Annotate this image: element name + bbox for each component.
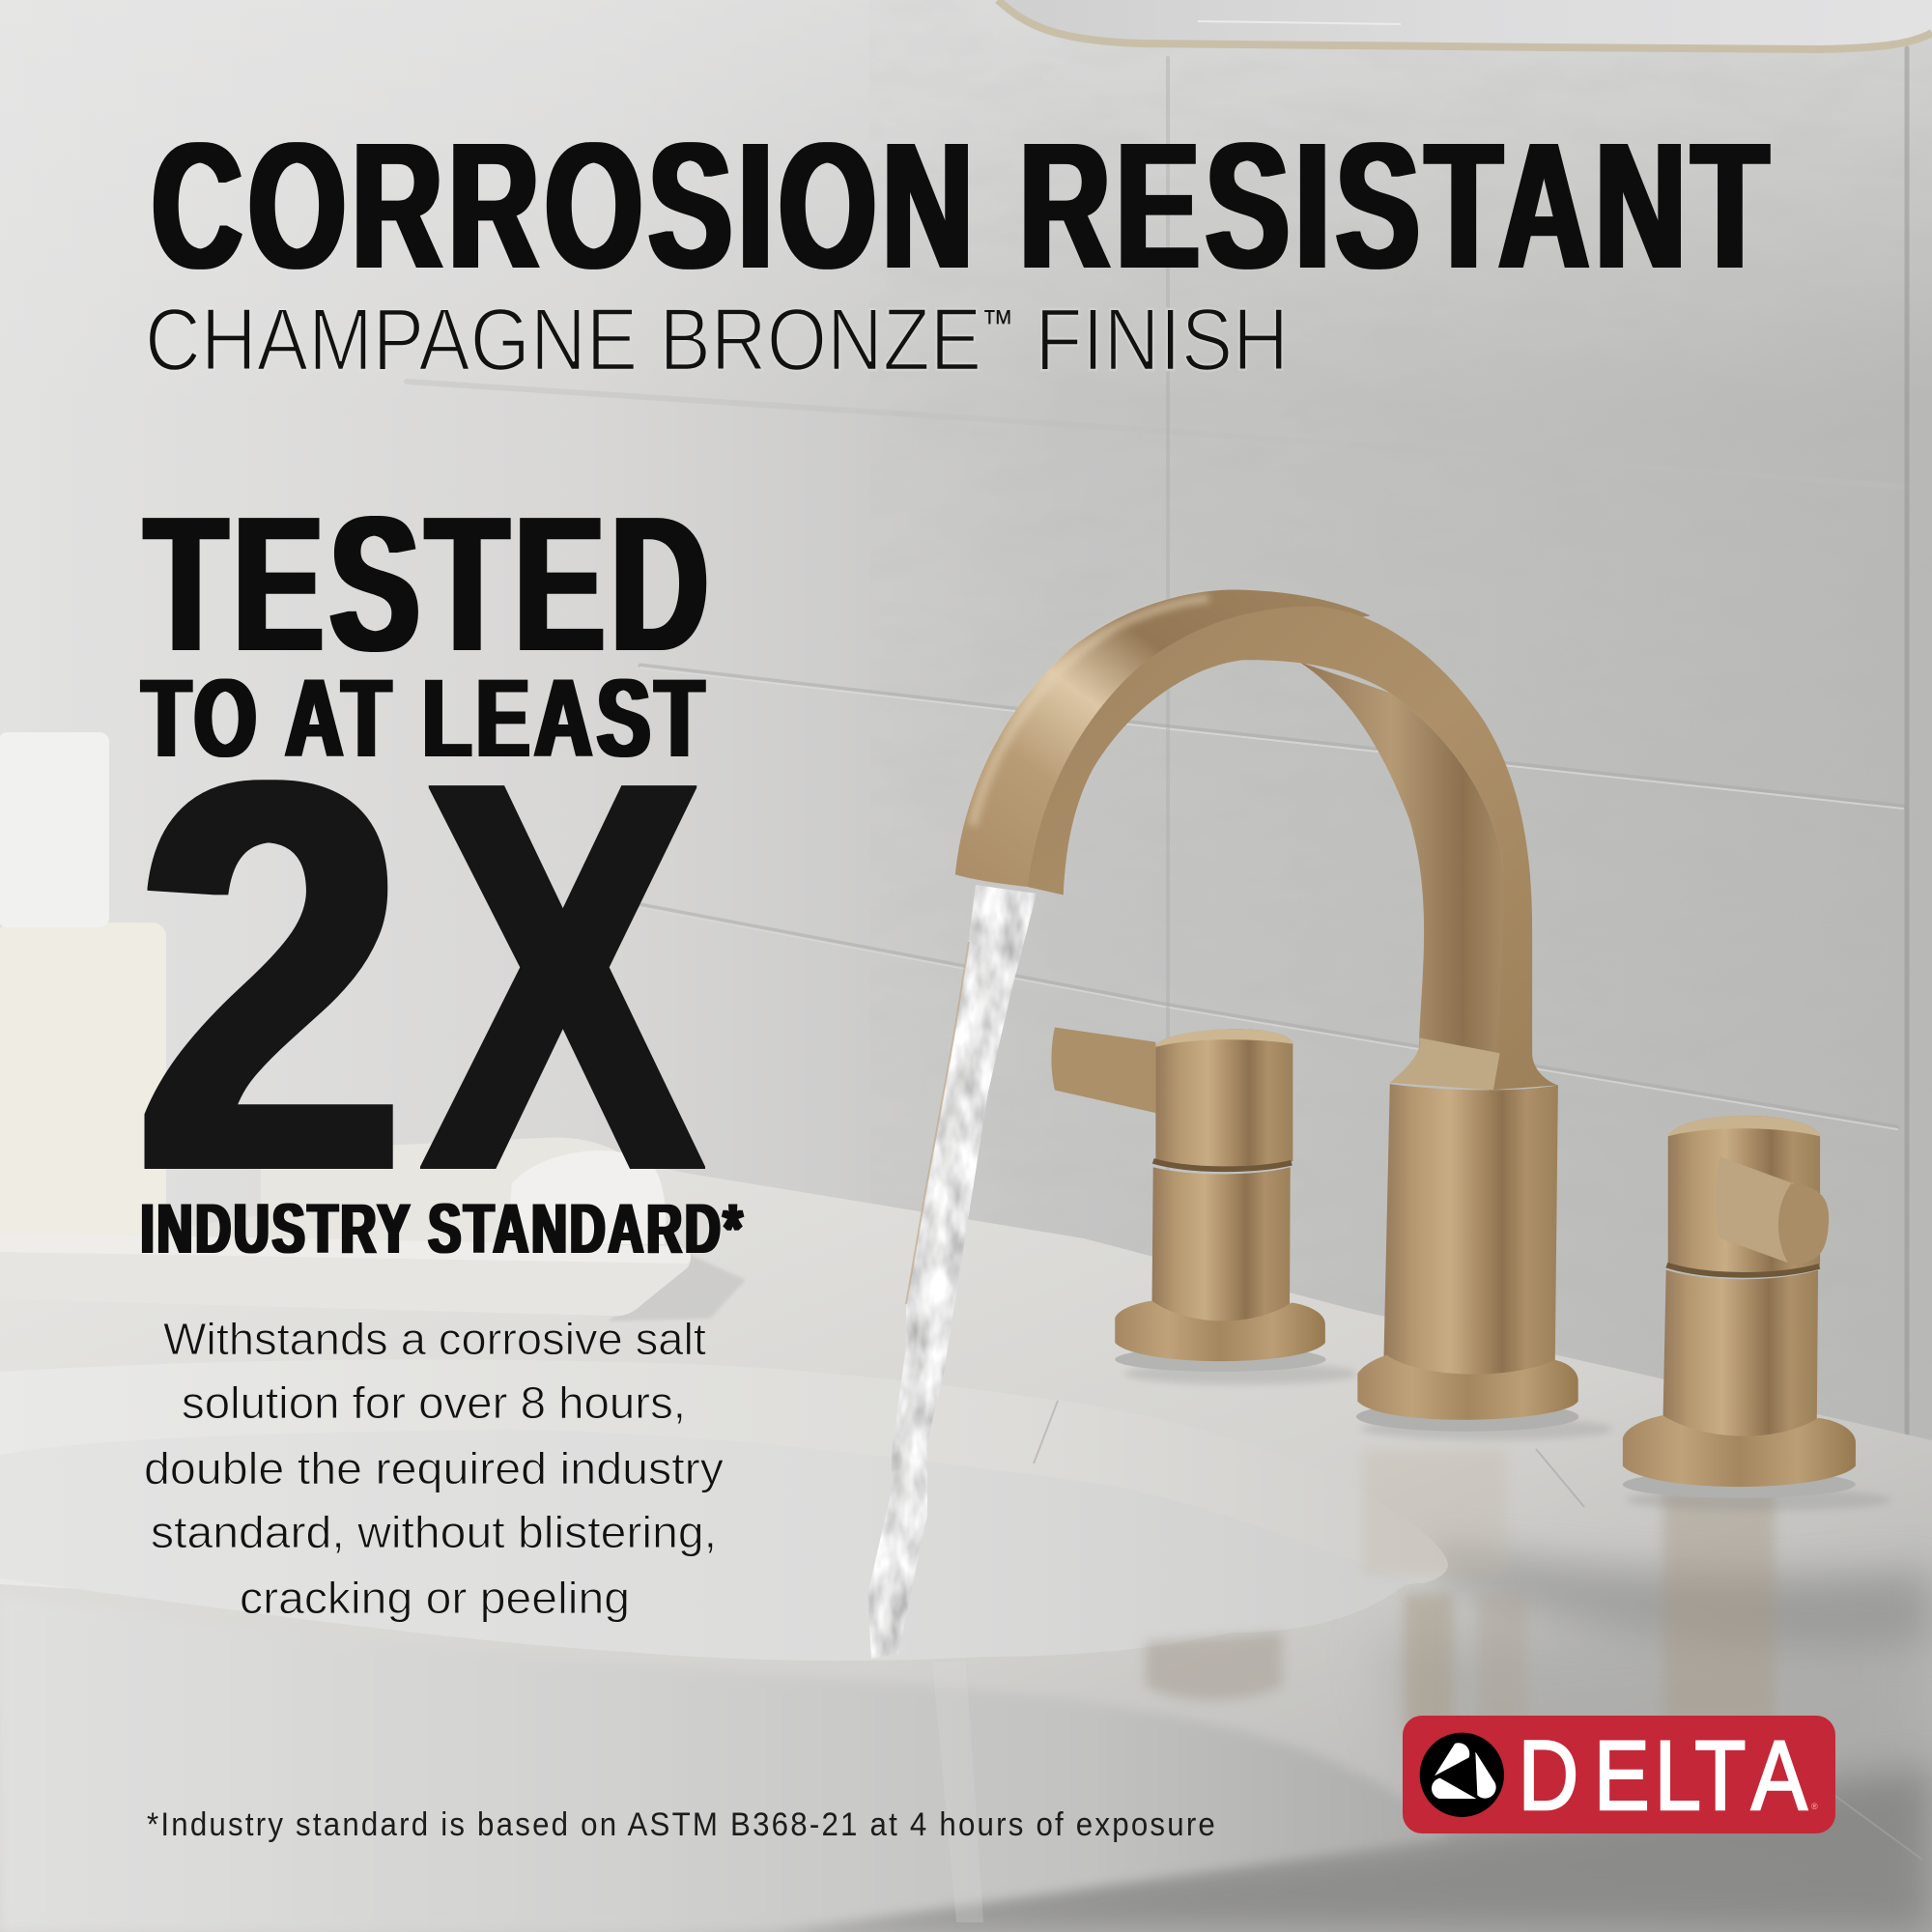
claim: 2X, letter: X — [422, 668, 705, 1287]
body text: Withstands a corrosive salt — [163, 1314, 706, 1364]
center base — [1357, 1355, 1578, 1420]
logo mark — [1420, 1733, 1504, 1817]
water reflection — [932, 1662, 983, 1922]
right handle dome — [1668, 1116, 1820, 1136]
base shadows — [1124, 1362, 1891, 1511]
title: CORROSION RESISTANT — [152, 106, 1769, 307]
registered mark: ® — [1811, 1802, 1818, 1811]
body text — [144, 1314, 724, 1623]
footnote: *Industry standard is based on ASTM B368-21 at 4 hours of exposure — [147, 1805, 1215, 1842]
body text: standard, without blistering, — [151, 1507, 717, 1557]
subtitle: ™ — [981, 303, 1013, 344]
left lever — [1051, 1027, 1155, 1113]
spout front face — [1028, 607, 1558, 1091]
sink rim — [0, 1359, 1448, 1642]
right base — [1623, 1415, 1856, 1487]
right handle seam — [1666, 1265, 1819, 1275]
left base — [1115, 1301, 1325, 1361]
tube cap — [507, 1151, 666, 1244]
tray — [0, 1233, 691, 1316]
spout highlight — [973, 599, 1208, 825]
left base washer — [1115, 1347, 1326, 1372]
left handle top — [1155, 1029, 1293, 1170]
left handle seam — [1153, 1161, 1292, 1169]
logo plate — [1403, 1716, 1835, 1833]
left products: bottle and tube on a tray — [0, 732, 746, 1321]
claim: industry standard: INDUSTRY STANDARD* — [141, 1190, 743, 1268]
subtitle: FINISH — [1013, 291, 1289, 389]
right base washer — [1623, 1471, 1856, 1498]
neck flare — [1390, 1037, 1500, 1091]
mirror at top right — [998, 0, 1932, 49]
right handle top — [1668, 1116, 1820, 1276]
claim: to at least: TO AT LEAST — [142, 657, 704, 781]
bottle body — [0, 923, 166, 1241]
right handle lower — [1662, 1270, 1818, 1437]
faucet — [955, 589, 1891, 1511]
water stream — [867, 885, 1036, 1922]
sink front left surface — [0, 1594, 1449, 1932]
bottle cap — [0, 732, 109, 927]
subtitle: CHAMPAGNE BRONZE — [145, 291, 1106, 389]
logo wordmark: DELTA — [1519, 1720, 1807, 1832]
claim block — [134, 478, 743, 1287]
sink basin — [0, 1430, 1410, 1661]
body text: double the required industry — [144, 1443, 724, 1493]
spout back tube — [955, 589, 1371, 895]
marble counter top — [0, 1159, 1932, 1932]
right lever wedge — [1716, 1156, 1794, 1263]
Delta logo — [1403, 1716, 1835, 1833]
left handle lower — [1151, 1167, 1291, 1326]
rim vein — [1034, 1401, 1058, 1463]
background: tiled wall — [0, 0, 1932, 1546]
body text: solution for over 8 hours, — [182, 1378, 686, 1428]
claim: 2X, numeral: 2 — [134, 667, 406, 1286]
body text: cracking or peeling — [240, 1573, 630, 1623]
tray shadow — [609, 1248, 746, 1321]
center column — [1383, 1084, 1558, 1386]
center base washer — [1356, 1402, 1578, 1432]
left handle dome — [1155, 1029, 1293, 1047]
tube — [261, 1137, 667, 1246]
claim: tested: TESTED — [145, 478, 708, 692]
faucet reflections on counter — [1146, 1449, 1775, 1729]
right lever tip — [1778, 1183, 1829, 1264]
arch underside — [1299, 662, 1503, 1078]
